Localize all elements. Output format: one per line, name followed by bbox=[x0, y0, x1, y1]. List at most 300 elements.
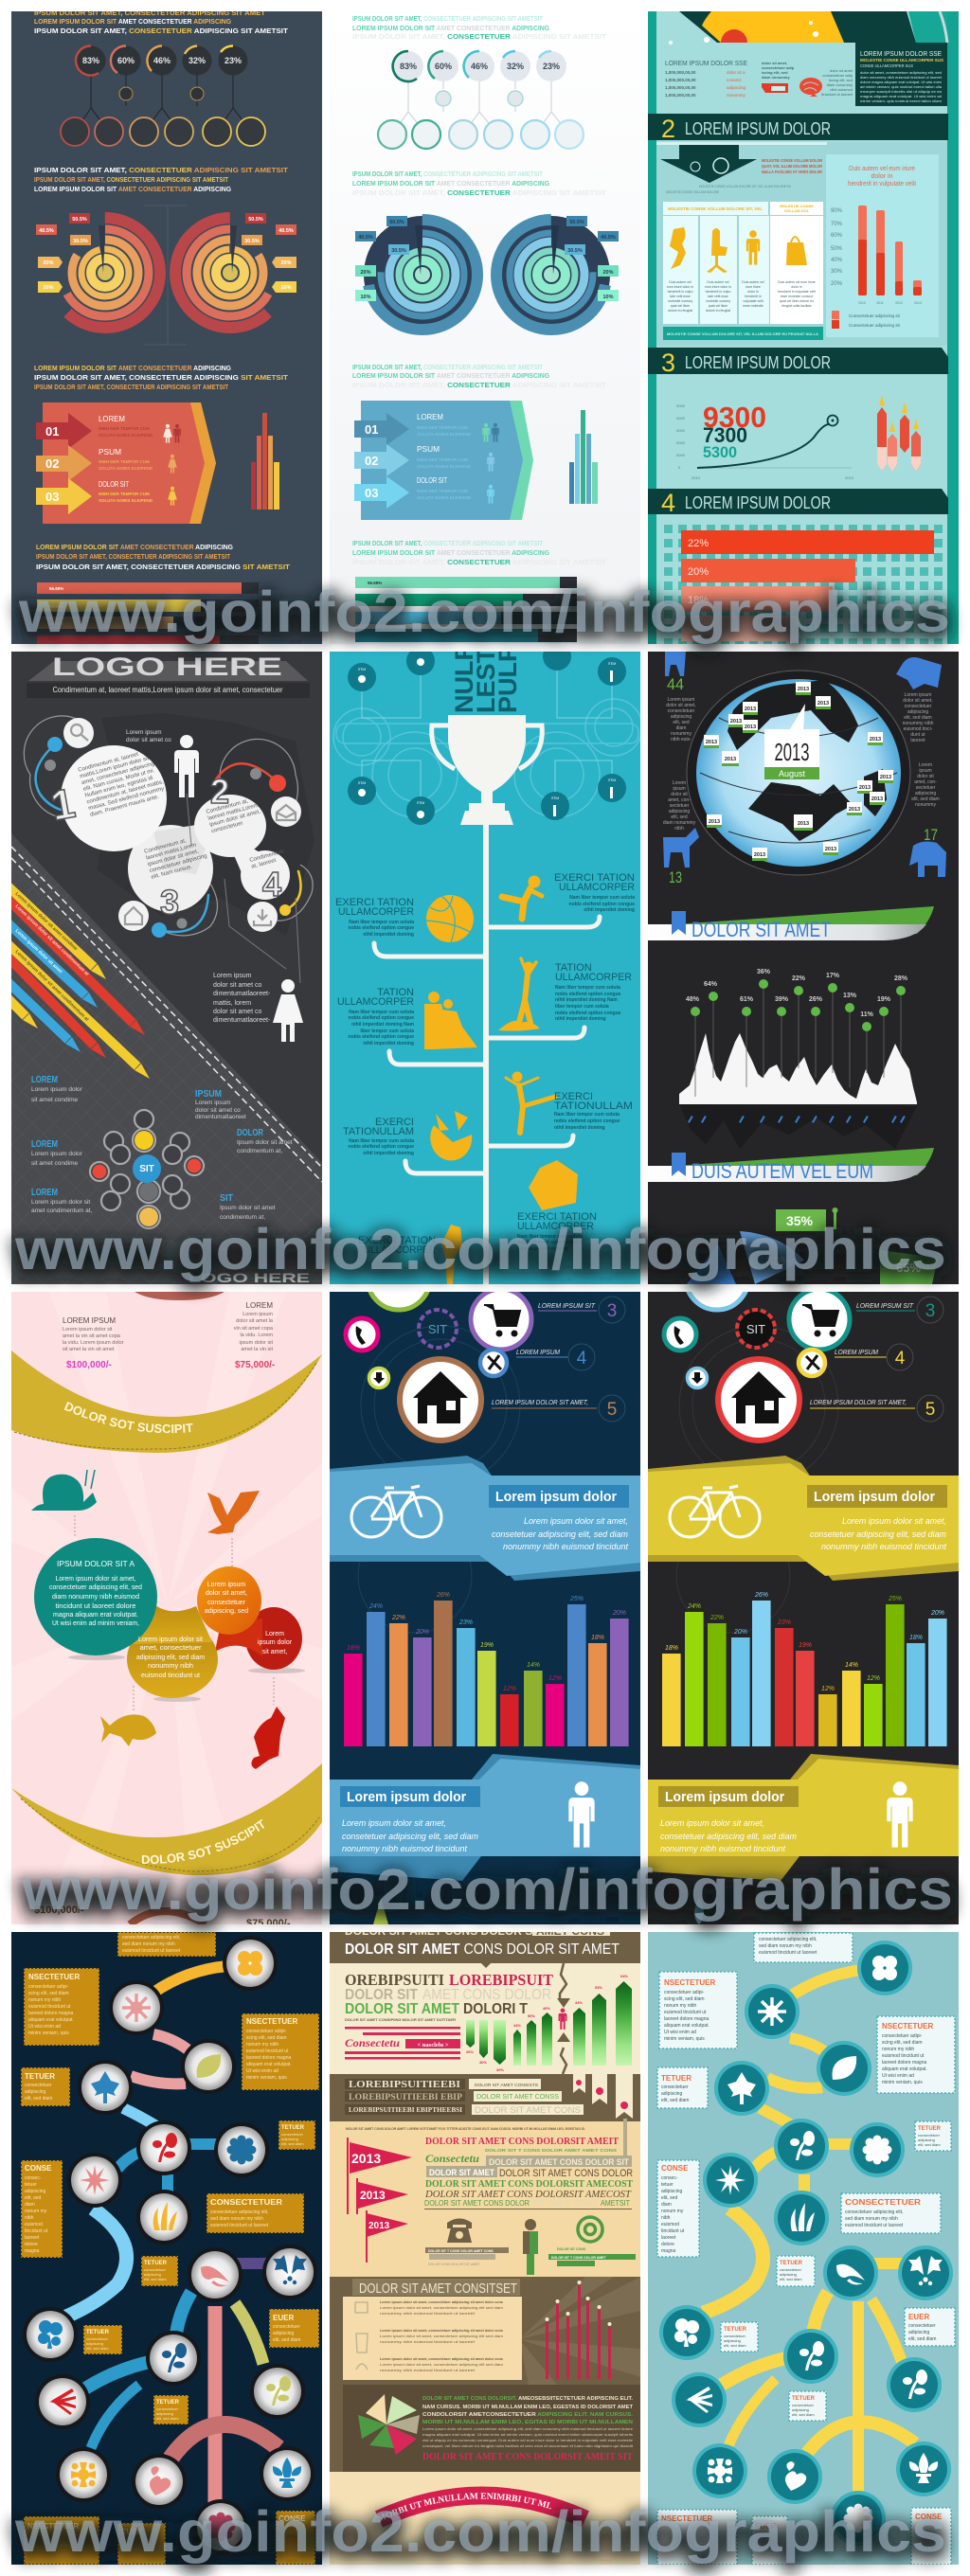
stamp text: euismod bbox=[661, 2222, 679, 2227]
big arrow panel: DOLOR SIT bbox=[99, 479, 129, 489]
intro text block: iscing elit, sed bbox=[762, 70, 788, 75]
stamp text: EUER bbox=[121, 2528, 142, 2536]
dark arrow graphic: MOLESTIE CONSE VOLLUM DOLOR bbox=[762, 158, 823, 163]
big arrow panel: SOLUTA NOBIS ELEIFEND bbox=[99, 433, 153, 438]
stamp text: consectetuer bbox=[86, 2336, 109, 2341]
side text: consectetuer bbox=[668, 708, 695, 714]
icon: polygon chart bbox=[529, 1160, 578, 1210]
dark summary block: CONDOLORSIT AMETCONSECTETUER ADIPISCING ELIT. NAM CURSUS. bbox=[422, 2412, 634, 2418]
small date tags: 2013 bbox=[825, 847, 836, 852]
bar chart: 22% bbox=[391, 1615, 405, 1621]
big arrow panel: NIBH DER TEMPOR CUM bbox=[417, 425, 468, 430]
stamp text: consectetuer adipi- bbox=[246, 2029, 287, 2034]
chevron bars: 30% bbox=[496, 2067, 504, 2072]
stamp text: nonum my nibh bbox=[246, 2042, 278, 2048]
banner top: Lorem ipsum dolor sit amet, bbox=[842, 1516, 946, 1526]
mini bar chart bbox=[569, 410, 598, 504]
dark summary block: NAM CURSUS. MORBI UT MI.NULLAM ENIM LEO, EGESTAS ID DOLORSIT AMET bbox=[422, 2405, 634, 2410]
pie chart fragments: 35% bbox=[786, 1213, 814, 1228]
woman with text: dimentumatlaoreet- bbox=[213, 1017, 271, 1024]
icon: cart bbox=[789, 1289, 850, 1350]
icon: ballerina bbox=[506, 1074, 555, 1133]
stamp text: CONSECTETUER bbox=[210, 2198, 282, 2207]
stamp text: consectetuer bbox=[156, 2406, 179, 2411]
mountain chart: 28% bbox=[894, 975, 908, 982]
chart tags: 20% bbox=[360, 270, 371, 276]
bubble numbers: 3 bbox=[160, 883, 179, 921]
table with silhouettes: VOLLUM DOL bbox=[784, 208, 810, 213]
bottom marker bbox=[694, 1898, 704, 1924]
big arrow panel: 02 bbox=[45, 456, 59, 471]
stamp text: consectetuer bbox=[908, 2323, 936, 2329]
lower brown band: LOREBIPSUITIEEBI EBIPTHEEBSI bbox=[349, 2106, 462, 2114]
cream text box: nonummy nibh euismod tincidunt ut laoreet bbox=[380, 2369, 476, 2372]
tree connectors bbox=[392, 78, 569, 134]
small date tags: 2013 bbox=[709, 819, 720, 825]
heading lines top: LOREM IPSUM DOLOR SIT AMET CONSECTETUER ADIPISCING bbox=[34, 17, 231, 26]
top text columns: vin sit amet copa bbox=[234, 1326, 274, 1332]
stamp text: consectetuer bbox=[281, 2132, 304, 2137]
heading lines top: LOREM IPSUM DOLOR SIT AMET CONSECTETUER ADIPISCING bbox=[352, 24, 549, 32]
icon: cat bbox=[251, 1707, 285, 1769]
table with silhouettes: dolor in bbox=[747, 290, 759, 294]
small date tags: 2013 bbox=[754, 852, 765, 858]
stamp text: euismod tincidunt ut laoreet bbox=[759, 1950, 817, 1956]
bubble text: condimentum at, laoreet mattis, bbox=[86, 779, 165, 805]
table with silhouettes: eum iriure dolor in bbox=[705, 285, 731, 289]
small connector circles bbox=[119, 87, 204, 100]
dark arrow graphic bbox=[660, 145, 823, 194]
heading lines 2: LOREM IPSUM DOLOR SIT AMET CONSECTETUER ADIPISCING bbox=[34, 185, 231, 193]
dark summary block: DOLOR SIT AMET CONS DOLORSIT. AMEOSEBSIITECTETUER ADIPISCING ELIT. bbox=[422, 2396, 633, 2402]
stamp text: consectetuer bbox=[661, 2084, 689, 2090]
bubble text: Nullam enim leo, egestas id bbox=[84, 776, 153, 799]
small date tags: 2013 bbox=[871, 796, 883, 802]
side text: Lorem ipsum bbox=[905, 692, 931, 698]
intro text block: tincidunt ut laoreet bbox=[821, 92, 853, 97]
text blocks: Nam liber tempor cum soluta bbox=[554, 1112, 620, 1118]
table with silhouettes: hendrerit in bbox=[745, 295, 762, 298]
small date tags: 2013 bbox=[798, 821, 809, 827]
stamp text: adipiscing bbox=[156, 2411, 173, 2416]
numbered labels: 4 bbox=[895, 1349, 906, 1368]
stamp text: scing elit, sed diam bbox=[664, 1996, 705, 2002]
stamp text: TETUER bbox=[918, 2126, 942, 2132]
big arrow panel: PSUM bbox=[99, 447, 121, 456]
bar chart box: Consectetuer adipiscing sit bbox=[849, 313, 901, 318]
shelves bbox=[374, 917, 600, 1173]
panel: turquoise trophy bbox=[330, 640, 640, 1284]
blob shadows bbox=[68, 1655, 305, 1702]
background rays bbox=[2, 1292, 333, 1924]
icon: kicker bbox=[502, 879, 542, 919]
text blocks: TATION bbox=[555, 962, 592, 974]
stamp text: sed diam nonum my nibh bbox=[210, 2216, 263, 2222]
dark arrow graphic: NULLA FACILISIS AT VERO DOLOR bbox=[762, 170, 823, 174]
blob diagram: ipsum dolor bbox=[258, 1639, 293, 1646]
stamp text: TETUER bbox=[86, 2330, 110, 2335]
panel: dark globe bbox=[648, 652, 959, 1284]
logo header: LOGO HERE bbox=[52, 653, 282, 681]
dark info box: minim veniam, quis nostrud exerci tation ullam bbox=[860, 98, 943, 103]
stamp text: nonum my bbox=[661, 2209, 684, 2214]
side text: dolor sit amet, bbox=[903, 698, 933, 704]
side text: euismod tinci- bbox=[904, 726, 933, 732]
stamp text: consec- bbox=[25, 2175, 42, 2181]
cream headline section: Consectetu bbox=[345, 2036, 400, 2049]
stamp text: nonum my nibh bbox=[882, 2047, 914, 2052]
stamp text: adipiscing bbox=[25, 2189, 45, 2194]
stamp text: euismod bbox=[25, 2222, 43, 2227]
banner bottom bbox=[330, 1754, 640, 1881]
molecule labels: condimentum at, bbox=[220, 1214, 265, 1221]
stamp text: elit, sed bbox=[661, 2195, 677, 2201]
percentage circles: 23% bbox=[225, 56, 242, 65]
dark summary block: Lorem ipsum dolor sit amet, consectetuer adipiscing elit, sed diam nonummy nibh euismod tincidunt ut laoreet dolore bbox=[422, 2427, 633, 2431]
heading lines 3: IPSUM DOLOR SIT AMET, CONSECTETUER ADIPISCING SIT AMETSIT bbox=[352, 363, 543, 371]
mountain chart: 13% bbox=[843, 993, 857, 999]
stamp text: aliquam erat volutpat. bbox=[664, 2023, 710, 2029]
progress bars bbox=[37, 582, 259, 644]
concentric chart left bbox=[50, 218, 160, 328]
stamp text: TETUER bbox=[661, 2074, 692, 2083]
numbered labels: LOREM IPSUM DOLOR SIT AMET, bbox=[810, 1400, 907, 1406]
table with silhouettes: hendrerit in vulputate velit bbox=[778, 290, 816, 294]
intro text block bbox=[665, 59, 853, 98]
text blocks: nihil imperdiet doming bbox=[554, 1125, 605, 1131]
percentage circles: 46% bbox=[153, 56, 171, 65]
bottom curved ribbon: DOLOR SOT SUSCIPIT bbox=[142, 1818, 264, 1864]
percentage circles bbox=[393, 51, 566, 81]
banner top: Lorem ipsum dolor bbox=[495, 1489, 617, 1505]
text blocks: nobis eleifend option congue bbox=[349, 1144, 414, 1150]
stamp text: euismod tincidunt ut laoreet bbox=[122, 1948, 181, 1954]
cream headline section: DOLOR SIT AMET bbox=[345, 2001, 459, 2017]
icon: basketball bbox=[426, 895, 474, 942]
stamp text: CONSE bbox=[661, 2164, 689, 2173]
green numbers: 44 bbox=[667, 675, 684, 693]
chart tags bbox=[355, 216, 619, 301]
blob diagram: consectetuer bbox=[207, 1600, 246, 1606]
small date tags bbox=[704, 682, 893, 861]
stamp text: consectetuer bbox=[792, 2403, 815, 2407]
dark info box: ad minim veniam, quis nostrud exerci tation ulla bbox=[860, 84, 943, 89]
chevron bars: 44% bbox=[513, 2023, 521, 2028]
cream headline section: < nasclelu > bbox=[417, 2042, 449, 2048]
bubble text: at, laoreet bbox=[251, 858, 277, 870]
bubble numbers: 4 bbox=[262, 865, 281, 903]
text blocks: Nam liber tempor cum soluta bbox=[517, 1234, 583, 1240]
stamp text: elit, sed diam bbox=[724, 2343, 746, 2348]
tan headlines: DOLOR SIT AMET CONS DOLOR SIT bbox=[489, 2157, 629, 2167]
lower brown band bbox=[330, 2074, 640, 2121]
dark arrow graphic: QUAT, VOL ILLUM DOLORE MOLOR bbox=[762, 164, 823, 169]
heading lines 2 bbox=[34, 166, 288, 193]
stamp text: Ut wisi enim ad bbox=[882, 2073, 914, 2079]
big arrow panel: SOLUTA NOBIS ELEIFEND bbox=[99, 466, 153, 471]
bar chart: 20% bbox=[612, 1610, 626, 1617]
cream text box: Lorem ipsum dolor sit amet, consectetuer adipiscing sit amet dolor cons bbox=[380, 2300, 503, 2304]
blob diagram: amet, consectetuer bbox=[140, 1645, 202, 1652]
text blocks: TATIONULLAM bbox=[343, 1126, 414, 1137]
big numbers and curve: 0 bbox=[678, 465, 681, 470]
heading lines 2 bbox=[352, 170, 606, 197]
stamp text: euismod tincidunt ut bbox=[28, 2004, 71, 2010]
top text columns bbox=[63, 1301, 275, 1370]
dark info box: magna aliquam erat volutpat. Ut wisi enim ad bbox=[860, 94, 942, 98]
icon: book bbox=[762, 83, 788, 93]
bar chart: 23% bbox=[458, 1619, 473, 1626]
stamp text: aliquam erat volutpat. bbox=[28, 2017, 74, 2023]
molecule labels bbox=[31, 1075, 293, 1221]
big arrow panel: NIBH DER TEMPOR CUM bbox=[99, 459, 150, 464]
pennant flags: 2013 bbox=[351, 2151, 381, 2166]
numbered labels: LOREM IPSUM SIT bbox=[856, 1303, 914, 1310]
cream headline section: AMET CONS DOLOR bbox=[422, 1987, 551, 2003]
numbered labels: 3 bbox=[607, 1301, 617, 1321]
item badges: ITEM bbox=[358, 781, 366, 785]
text blocks: ULLAMCORPER bbox=[338, 906, 414, 918]
bubble text: diam. Praesent mauris ante. bbox=[90, 795, 160, 818]
banner: dolor sit amet: DOLOR SIT AMET bbox=[692, 918, 831, 941]
numbered labels: 5 bbox=[925, 1400, 935, 1420]
stamp text: adipiscing bbox=[661, 2091, 682, 2097]
numbered labels: LOREM IPSUM bbox=[835, 1350, 878, 1356]
side text: Lorem ipsum bbox=[668, 697, 694, 703]
side text bbox=[663, 692, 940, 832]
logo header bbox=[27, 653, 310, 698]
chart tags: 30.5% bbox=[567, 248, 583, 254]
intro text block: 1,000,000,00,00 bbox=[665, 70, 696, 75]
heading lines 4: IPSUM DOLOR SIT AMET, CONSECTETUER ADIPISCING SIT AMETSIT bbox=[352, 558, 606, 566]
panel: teal report bbox=[648, 11, 959, 644]
big arrow panel: LOREM bbox=[417, 412, 443, 421]
connectors bbox=[66, 1966, 278, 2503]
text blocks: ULLAMCORPER bbox=[364, 1244, 436, 1256]
mountain chart: 39% bbox=[775, 996, 789, 1003]
banner bottom bbox=[648, 1754, 959, 1881]
brown section: DOLOR SIT AMET CONSITSET bbox=[359, 2281, 517, 2297]
big numbers and curve: 5300 bbox=[703, 443, 737, 461]
small text near man: Lorem ipsum bbox=[126, 729, 162, 736]
text blocks bbox=[335, 872, 635, 1256]
stamp text: tincidunt ut bbox=[661, 2228, 685, 2234]
top text columns: dolor sit amet la bbox=[236, 1318, 274, 1324]
heading lines 4 bbox=[36, 543, 290, 571]
side text: elit, sed bbox=[671, 814, 688, 820]
caption tags bbox=[425, 2247, 636, 2266]
top brown band: DOLOR SIT AMET CONS DOLOR SIT bbox=[345, 1924, 544, 1938]
bubble text: massa. Sed eleifend nonummy bbox=[88, 786, 165, 812]
molecule labels: Ipsum dolor sit amet bbox=[237, 1139, 293, 1146]
stamp text: adipiscing bbox=[25, 2089, 45, 2095]
icon: download bbox=[369, 1368, 388, 1388]
stamp text: consectetuer adipiscing elit, bbox=[759, 1937, 817, 1942]
intro text block: 1,000,000,00,00 bbox=[665, 93, 696, 98]
callout 2013: 2013 bbox=[775, 738, 809, 766]
horizontal bar chart: 20% bbox=[688, 566, 709, 578]
cream text box bbox=[343, 2297, 522, 2380]
bar chart box: dolor in bbox=[871, 173, 893, 180]
tan headlines: DOLOR SIT AMET bbox=[429, 2168, 494, 2177]
zigzag divider bbox=[557, 1963, 570, 2074]
heading lines top: IPSUM DOLOR SIT AMET, CONSECTETUER ADIPISCING SIT AMETSIT bbox=[34, 27, 288, 35]
stamp text: EUER bbox=[273, 2314, 294, 2322]
bar chart bbox=[344, 1592, 629, 1746]
side text: Lorem bbox=[673, 780, 686, 786]
bar chart: 20% bbox=[415, 1629, 429, 1636]
heading lines top: IPSUM DOLOR SIT AMET, CONSECTETUER ADIPISCING SIT AMETSIT bbox=[352, 14, 543, 23]
bar chart: 12% bbox=[503, 1686, 516, 1692]
big arrow panel: LOREM bbox=[99, 414, 125, 423]
chevron bars: 40% bbox=[543, 2006, 550, 2011]
icon: target bbox=[578, 2217, 602, 2242]
table with silhouettes: MOLESTIE CONSE VOLLUM DOLORE SIT, VEL ILLUM DOLORE EU FEUGIAT NULLA bbox=[667, 331, 818, 336]
side text: nibh euis- bbox=[671, 737, 692, 742]
item badges bbox=[348, 642, 626, 825]
pennant flags bbox=[347, 2138, 412, 2263]
icon: plane bbox=[480, 1350, 507, 1376]
heading lines 4: IPSUM DOLOR SIT AMET, CONSECTETUER ADIPISCING SIT AMETSIT bbox=[352, 539, 543, 547]
top text columns: la vidu. Lorem bbox=[240, 1333, 273, 1338]
concentric chart right bbox=[493, 216, 610, 333]
connected white bubbles bbox=[61, 745, 290, 912]
bar chart: 12% bbox=[548, 1675, 562, 1682]
orbit dots bbox=[45, 737, 291, 938]
blob diagram: magna aliquam erat volutpat. bbox=[53, 1612, 138, 1619]
stamp text: euismod tincidunt ut bbox=[664, 2010, 707, 2015]
section band 2 bbox=[648, 114, 948, 143]
bubble text: ipsum dolor sit amet, bbox=[147, 849, 200, 868]
heading lines 4: IPSUM DOLOR SIT AMET, CONSECTETUER ADIPISCING SIT AMETSIT bbox=[36, 563, 290, 571]
big numbers and curve bbox=[676, 401, 854, 480]
pennant flags: 2013 bbox=[368, 2221, 390, 2231]
stamp text: consec- bbox=[661, 2175, 678, 2181]
stamp text: TETUER bbox=[792, 2396, 816, 2402]
blob diagram: Ut wisi enim ad minim veniam, bbox=[52, 1620, 139, 1627]
stamp text: CONSE bbox=[278, 2514, 306, 2523]
stamp text: adipiscing bbox=[918, 2138, 935, 2142]
flower medallions bbox=[659, 1941, 953, 2546]
stamp text: adipiscing bbox=[792, 2407, 809, 2412]
stamp text: elit, sed diam bbox=[25, 2096, 52, 2102]
table with silhouettes: dolore eu feugiat bbox=[668, 309, 692, 313]
stamp text: Ut wisi enim ad bbox=[28, 2024, 61, 2030]
stamp text: dolore bbox=[25, 2242, 38, 2247]
side text: Lorem bbox=[919, 762, 932, 768]
icon: cart bbox=[471, 1289, 531, 1350]
stamp text: minim veniam, quis bbox=[882, 2080, 923, 2085]
stamp text: elit, sed diam bbox=[780, 2277, 802, 2281]
title rotated: LESTI bbox=[472, 640, 500, 713]
dark info box: CONSE ULLAMCORPER SUS bbox=[860, 63, 913, 69]
banner: duis autem bbox=[648, 1148, 934, 1183]
chart tags: 40.5% bbox=[39, 228, 54, 234]
heading lines 4 bbox=[352, 539, 606, 566]
bubble text: laoreet mattis,Lorem bbox=[146, 843, 197, 862]
side text: diam nonummy bbox=[663, 820, 696, 826]
text blocks: nihil imperdiet doming Nam bbox=[351, 1022, 415, 1028]
tan headlines: AMETSIT bbox=[601, 2199, 630, 2208]
molecule labels: Ipsum dolor sit amet bbox=[220, 1205, 276, 1211]
small text near man: dolor sit amet co bbox=[126, 737, 171, 743]
chart tags: 10% bbox=[360, 295, 371, 300]
chart tags: 30.5% bbox=[244, 239, 260, 244]
stamp text: consectetuer bbox=[25, 2083, 52, 2088]
blob diagram: IPSUM DOLOR SIT A bbox=[57, 1560, 135, 1568]
side text: nonummy nibh bbox=[903, 721, 934, 726]
chart tags: 10% bbox=[280, 285, 292, 291]
heading lines 4: LOREM IPSUM DOLOR SIT AMET CONSECTETUER ADIPISCING bbox=[352, 548, 549, 557]
icon: phone bbox=[346, 1318, 378, 1351]
faint rings bbox=[358, 1326, 520, 1633]
molecule labels: Lorem ipsum dolor sit bbox=[31, 1199, 90, 1206]
progress bars: 56.65% bbox=[49, 604, 63, 609]
bar chart bbox=[662, 1592, 947, 1746]
banner: dolor sit amet bbox=[648, 906, 934, 941]
small date tags: 2013 bbox=[745, 707, 756, 712]
diagonal arrow ribbons: Lorem ipsum dolor sit amet condime bbox=[14, 891, 79, 952]
chart tags bbox=[36, 213, 296, 293]
pennant flags: 2013 bbox=[360, 2189, 386, 2202]
table with silhouettes: vulputate velit bbox=[743, 299, 763, 303]
table with silhouettes: hendrerit in vulpu bbox=[668, 290, 692, 294]
bottom prices: $75,000/- bbox=[246, 1918, 291, 1929]
stamp text: magna bbox=[661, 2248, 676, 2254]
cream headline section: LOREBIPSUIT bbox=[449, 1971, 554, 1989]
chart tags: 20% bbox=[43, 260, 54, 266]
stamp text: TETUER bbox=[724, 2327, 747, 2333]
top dial graphic bbox=[669, 11, 947, 45]
top semicircle bbox=[135, 1292, 225, 1300]
text blocks: nihil imperdiet doming bbox=[363, 932, 414, 938]
stamp text: adipiscing bbox=[281, 2137, 298, 2141]
stamp text: euismod tincidunt ut bbox=[882, 2053, 925, 2059]
molecule labels: SIT bbox=[220, 1193, 233, 1204]
percentage circles: 32% bbox=[189, 56, 206, 65]
badge: SIT: SIT bbox=[746, 1322, 765, 1336]
stamp text: NSECTETUER bbox=[27, 2522, 79, 2531]
diagonal lower section bbox=[11, 833, 322, 1284]
item badges: ITEM bbox=[417, 801, 424, 805]
stamp text: consectetuer adipiscing elit, bbox=[845, 2209, 903, 2215]
icon: telephone bbox=[447, 2218, 472, 2243]
side text: dunt ut bbox=[910, 732, 925, 738]
connectors bbox=[703, 1970, 915, 2500]
blob diagram: Lorem ipsum dolor sit bbox=[138, 1637, 203, 1643]
section 2 background bbox=[656, 142, 947, 346]
stamp text: euismod tincidunt ut laoreet bbox=[845, 2223, 904, 2228]
molecule labels: amet condimentum at, bbox=[31, 1208, 93, 1214]
pie chart fragments bbox=[687, 1208, 938, 1284]
green numbers bbox=[667, 675, 938, 886]
small connector circles bbox=[436, 91, 523, 106]
heading lines 3: IPSUM DOLOR SIT AMET, CONSECTETUER ADIPISCING SIT AMETSIT bbox=[34, 383, 228, 391]
lower logo: LOGO HERE bbox=[189, 1270, 310, 1285]
stamp text: laoreet bbox=[25, 2235, 40, 2241]
stamp text: CONSE bbox=[25, 2164, 52, 2173]
big arrow panel bbox=[36, 402, 216, 524]
big arrow panel: SOLUTA NOBIS ELEIFEND bbox=[417, 464, 472, 469]
stamp text: euismod tincidunt ut laoreet bbox=[210, 2223, 269, 2228]
mountain chart: 11% bbox=[860, 1011, 874, 1018]
molecule labels: IPSUM bbox=[195, 1089, 222, 1100]
big arrow panel: 02 bbox=[365, 454, 378, 468]
bar chart: 12% bbox=[867, 1675, 880, 1682]
table with silhouettes: eum iriure dolor in bbox=[667, 285, 693, 289]
woman with text: dolor sit amet co bbox=[213, 1009, 261, 1015]
table with silhouettes: hendrerit in vulpu bbox=[706, 290, 730, 294]
